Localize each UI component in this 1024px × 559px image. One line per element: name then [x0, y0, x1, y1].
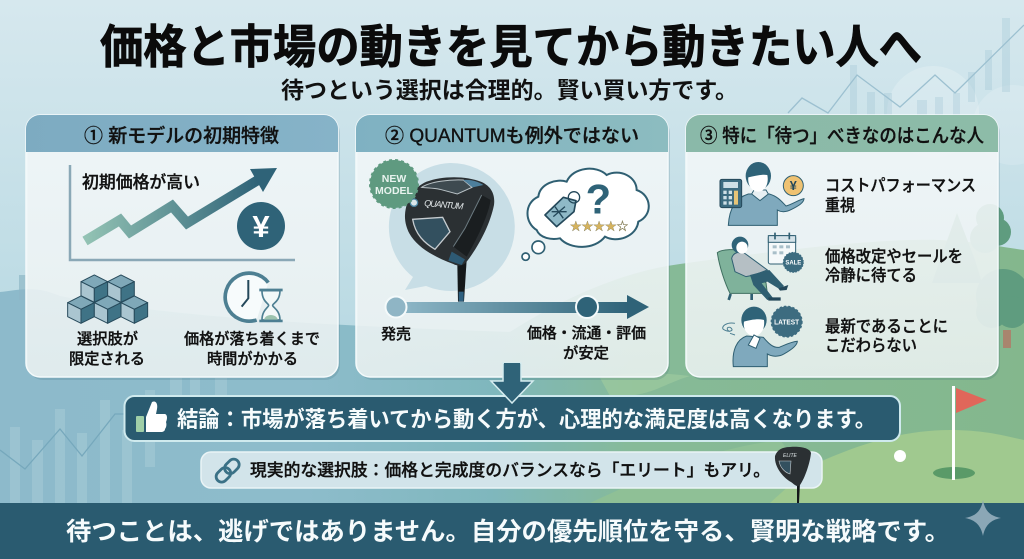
title: 価格と市場の動きを見てから動きたい人へ — [100, 21, 922, 73]
timeline arrow — [386, 295, 649, 319]
panel 3 header: ③ 特に「待つ」べきなのはこんな人 — [700, 125, 984, 147]
label: limited options: 選択肢が — [77, 329, 138, 348]
icon: stacked boxes — [68, 275, 148, 323]
text: wait calmly for price revisions and sales: 価格改定やセールを — [825, 247, 963, 266]
text: not particular about newest — [825, 317, 948, 355]
icon: person with calculator and yen: ¥ — [790, 179, 797, 193]
panel 3 header — [686, 115, 998, 152]
icon: person with calculator and yen — [720, 162, 804, 225]
label: takes time for price to settle: 価格が落ち着くまで — [184, 329, 320, 348]
panel 1 header — [26, 115, 338, 152]
subtitle: 待つという選択は合理的。賢い買い方です。 — [281, 77, 738, 103]
panel: QUANTUM is no exception — [356, 115, 670, 380]
icon: person thinking with latest badge: LATEST — [774, 319, 800, 326]
banner: realistic option — [201, 447, 822, 503]
text: wait calmly for price revisions and sales — [825, 247, 963, 285]
label: limited options: 限定される — [69, 350, 145, 368]
icon: driver club: QUANTUM — [424, 198, 464, 211]
icon: small driver club: ELITE — [783, 453, 798, 459]
icon: chain link — [214, 457, 241, 484]
speech circle behind club — [389, 163, 515, 291]
label: price distribution reviews stabilise: が安定 — [563, 344, 609, 362]
thought bubble: price tag and rating — [522, 169, 649, 260]
icon: clock and hourglass — [225, 273, 283, 321]
text: cost performance: コストパフォーマンス — [825, 176, 976, 195]
footer band — [0, 500, 1024, 559]
label: release: 発売 — [381, 326, 411, 343]
text: cost performance: 重視 — [825, 196, 855, 215]
badge: new model — [370, 160, 418, 208]
conclusion text: 結論：市場が落ち着いてから動く方が、心理的な満足度は高くなります。 — [177, 407, 876, 432]
badge: new model: MODEL — [375, 185, 414, 197]
icon: person thinking with latest badge — [723, 306, 802, 367]
text: wait calmly for price revisions and sales: 冷静に待てる — [825, 266, 917, 285]
text: cost performance — [825, 176, 976, 215]
label: price distribution reviews stabilise — [527, 325, 646, 362]
panel 2 header: ② QUANTUMも例外ではない — [385, 125, 639, 147]
icon: yen coin: ¥ — [252, 209, 270, 244]
arrow: down to conclusion — [491, 363, 533, 403]
thought bubble: price tag and rating: ★★★★☆ — [570, 220, 628, 233]
text: not particular about newest: こだわらない — [825, 336, 917, 355]
icon: sparkle — [965, 500, 1001, 536]
icon: driver club — [405, 177, 494, 302]
label: takes time for price to settle — [184, 329, 320, 368]
golf flag and ball — [894, 386, 987, 480]
banner: conclusion — [124, 396, 900, 441]
icon: small driver club — [775, 447, 811, 503]
icon: person in armchair with calendar: SALE — [785, 261, 801, 267]
chart: rising price: 初期価格が高い — [82, 172, 200, 192]
text: not particular about newest: 最新であることに — [825, 317, 948, 336]
option text: 現実的な選択肢：価格と完成度のバランスなら「エリート」もアリ。 — [250, 461, 770, 480]
thought bubble: price tag and rating: ? — [586, 175, 611, 222]
panel 1 header: ① 新モデルの初期特徴 — [84, 124, 279, 147]
chart: rising price — [70, 165, 295, 260]
icon: thumbs up — [136, 401, 167, 432]
icon: person in armchair with calendar — [717, 233, 803, 301]
panel: who should wait — [686, 115, 1000, 380]
badge: new model: NEW — [382, 173, 406, 185]
panel: new model initial traits — [26, 115, 340, 380]
panel 2 header — [356, 115, 668, 152]
footer text: 待つことは、逃げではありません。自分の優先順位を守る、賢明な戦略です。 — [66, 518, 950, 546]
label: price distribution reviews stabilise: 価格・流通・評価 — [527, 325, 646, 342]
label: takes time for price to settle: 時間がかかる — [207, 349, 298, 368]
label: limited options — [69, 329, 145, 368]
icon: yen coin — [237, 202, 285, 250]
